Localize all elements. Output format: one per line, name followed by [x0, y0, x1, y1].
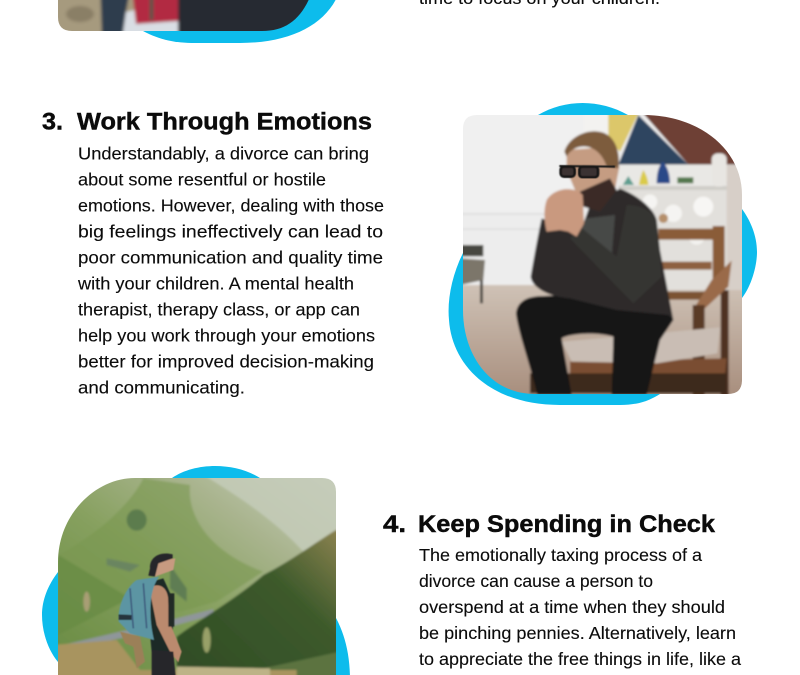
number 4: 4.: [383, 511, 406, 538]
title: Work Through Emotions: [77, 108, 372, 136]
text block: step 4 body: be pinching pennies. Alternatively, learn: [419, 623, 736, 643]
blue blob behind step 4 photo: [42, 466, 350, 675]
text block: step 3 body: about some resentful or hostile: [78, 170, 326, 190]
text block: step 4 body: [419, 545, 741, 669]
blue blob behind step 3 photo: [449, 103, 757, 405]
heading: step 3: [42, 108, 372, 136]
text block: step 3 body: with your children. A mental health: [77, 274, 354, 294]
text block: step 3 body: poor communication and quality time: [78, 248, 383, 268]
text block: step 3 body: help you work through your emotions: [78, 326, 375, 346]
title: Keep Spending in Check: [418, 511, 716, 538]
text block: step 3 body: [77, 144, 384, 398]
text block: step 4 body: The emotionally taxing process of a: [419, 545, 702, 565]
blue blob behind step 2 photo: [143, 0, 338, 43]
panel: step 4 photo: [42, 466, 350, 675]
photo: parent in plaid shirt: [58, 0, 309, 31]
panel: step 3 photo: [449, 103, 757, 405]
photo: thoughtful man on chair: [460, 112, 747, 398]
panel: step 2 photo: [50, 0, 338, 43]
text block: step 3 body: emotions. However, dealing with those: [78, 196, 384, 216]
hiker figure: [119, 554, 182, 675]
text block: step 3 body: better for improved decision-making: [78, 352, 374, 372]
text block: step 4 body: overspend at a time when they should: [419, 597, 725, 617]
text block: step 4 body: to appreciate the free things in life, like a: [419, 649, 741, 669]
number 3: 3.: [42, 108, 63, 136]
text block: step 4 body: divorce can cause a person to: [419, 571, 653, 591]
text block: step 3 body: and communicating.: [78, 378, 245, 398]
text block: step 3 body: Understandably, a divorce can bring: [78, 144, 369, 164]
glasses: [559, 166, 615, 177]
text block: step 3 body: big feelings ineffectively can lead to: [78, 222, 383, 242]
photo: hiker in mountains: [53, 475, 340, 675]
heading: step 4: [383, 511, 716, 538]
text block: step 3 body: therapist, therapy class, or app can: [78, 300, 360, 320]
